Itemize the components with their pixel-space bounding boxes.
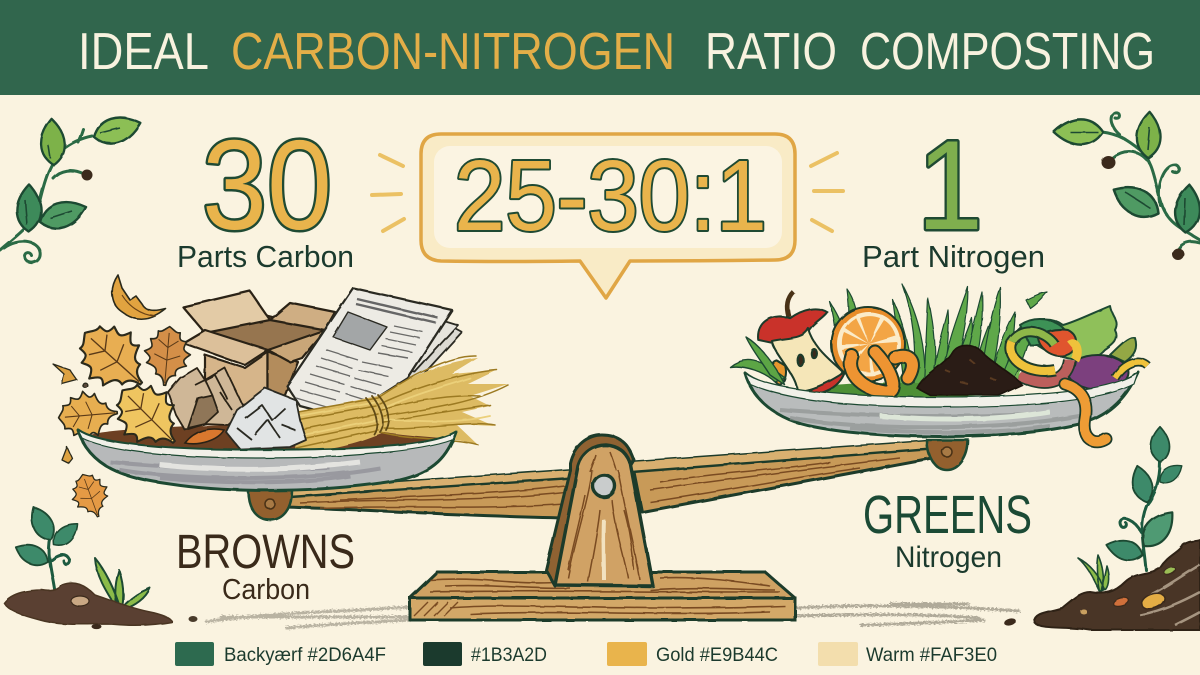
legend: warm: Warm #FAF3E0: [866, 645, 997, 666]
oak leaf: front yellow: [101, 369, 195, 463]
metal pan: left: [78, 430, 456, 490]
left pan: browns materials: [53, 275, 508, 523]
stat: 30 parts carbon: 30: [202, 114, 332, 256]
soil on pan: [85, 425, 445, 451]
legend: dark green: #1B3A2D: [471, 645, 547, 666]
balance scale: [248, 435, 968, 620]
hanger left: [248, 490, 292, 520]
beam: [285, 441, 932, 518]
leaf bits: [53, 364, 87, 463]
fallen leaf: top: [112, 275, 166, 319]
small leaf: [185, 429, 224, 444]
grass: centre: [830, 284, 1047, 385]
soil and green base: [808, 383, 992, 399]
title: IDEAL: [78, 23, 209, 81]
oak leaf: left: [57, 389, 119, 442]
stat: 1 part nitrogen: 1: [917, 114, 983, 256]
compost pile: [917, 345, 1022, 395]
legend: warm: [818, 642, 997, 666]
stat: 1 part nitrogen: Part Nitrogen: [862, 239, 1045, 274]
vine: top right: [1054, 111, 1200, 260]
legend: gold: [607, 642, 778, 666]
orange peel curl: [851, 352, 912, 392]
grass: left: [730, 337, 785, 385]
fulcrum: [546, 435, 653, 586]
orange half: [831, 307, 905, 381]
hanger right: [927, 440, 968, 470]
soil mound and sprout: bottom left: [4, 502, 198, 630]
newspaper: [287, 288, 462, 418]
pivot bolt: [593, 475, 615, 497]
oak leaf: rust: [142, 325, 193, 387]
crumpled white paper: [226, 388, 306, 449]
straw bundle: [295, 356, 508, 450]
ground scribbles: [205, 604, 1020, 628]
title: [78, 23, 1155, 81]
legend: backyard green: Backyærf #2D6A4F: [224, 645, 386, 666]
soil mound and sprout: bottom right: [1003, 427, 1200, 630]
ratio callout bubble: [421, 134, 795, 298]
title: RATIO: [705, 23, 837, 81]
label: browns: BROWNS: [176, 526, 355, 579]
hanging orange peel: [1065, 384, 1106, 442]
title: CARBON-NITROGEN: [231, 23, 675, 81]
stat: 1 part nitrogen: [862, 114, 1045, 274]
label: greens: [863, 485, 1032, 574]
colour legend: [175, 642, 997, 666]
label: greens: GREENS: [863, 485, 1032, 545]
right pan: greens materials: [730, 284, 1148, 442]
header banner: [0, 0, 1200, 95]
emphasis rays: [372, 153, 843, 231]
falling leaf: lower: [66, 468, 115, 523]
apple core: [758, 292, 845, 395]
vegetable peels: [1010, 329, 1148, 382]
oak leaf: large orange: [64, 310, 162, 407]
base: [410, 572, 795, 620]
legend: backyard green: [175, 642, 386, 666]
lettuce: [1018, 306, 1136, 362]
ratio value: 25-30:1: [454, 140, 767, 252]
metal pan: right: [745, 372, 1138, 437]
vine: top left: [0, 111, 144, 263]
stat: 30 parts carbon: Parts Carbon: [177, 239, 354, 274]
legend: gold: Gold #E9B44C: [656, 645, 778, 666]
cardboard box: [183, 291, 335, 405]
onion: [1068, 355, 1128, 389]
label: greens: Nitrogen: [895, 541, 1002, 574]
crumpled brown paper: [168, 368, 245, 430]
label: browns: Carbon: [222, 574, 310, 606]
label: browns: [176, 526, 355, 606]
legend: dark green: [423, 642, 547, 666]
